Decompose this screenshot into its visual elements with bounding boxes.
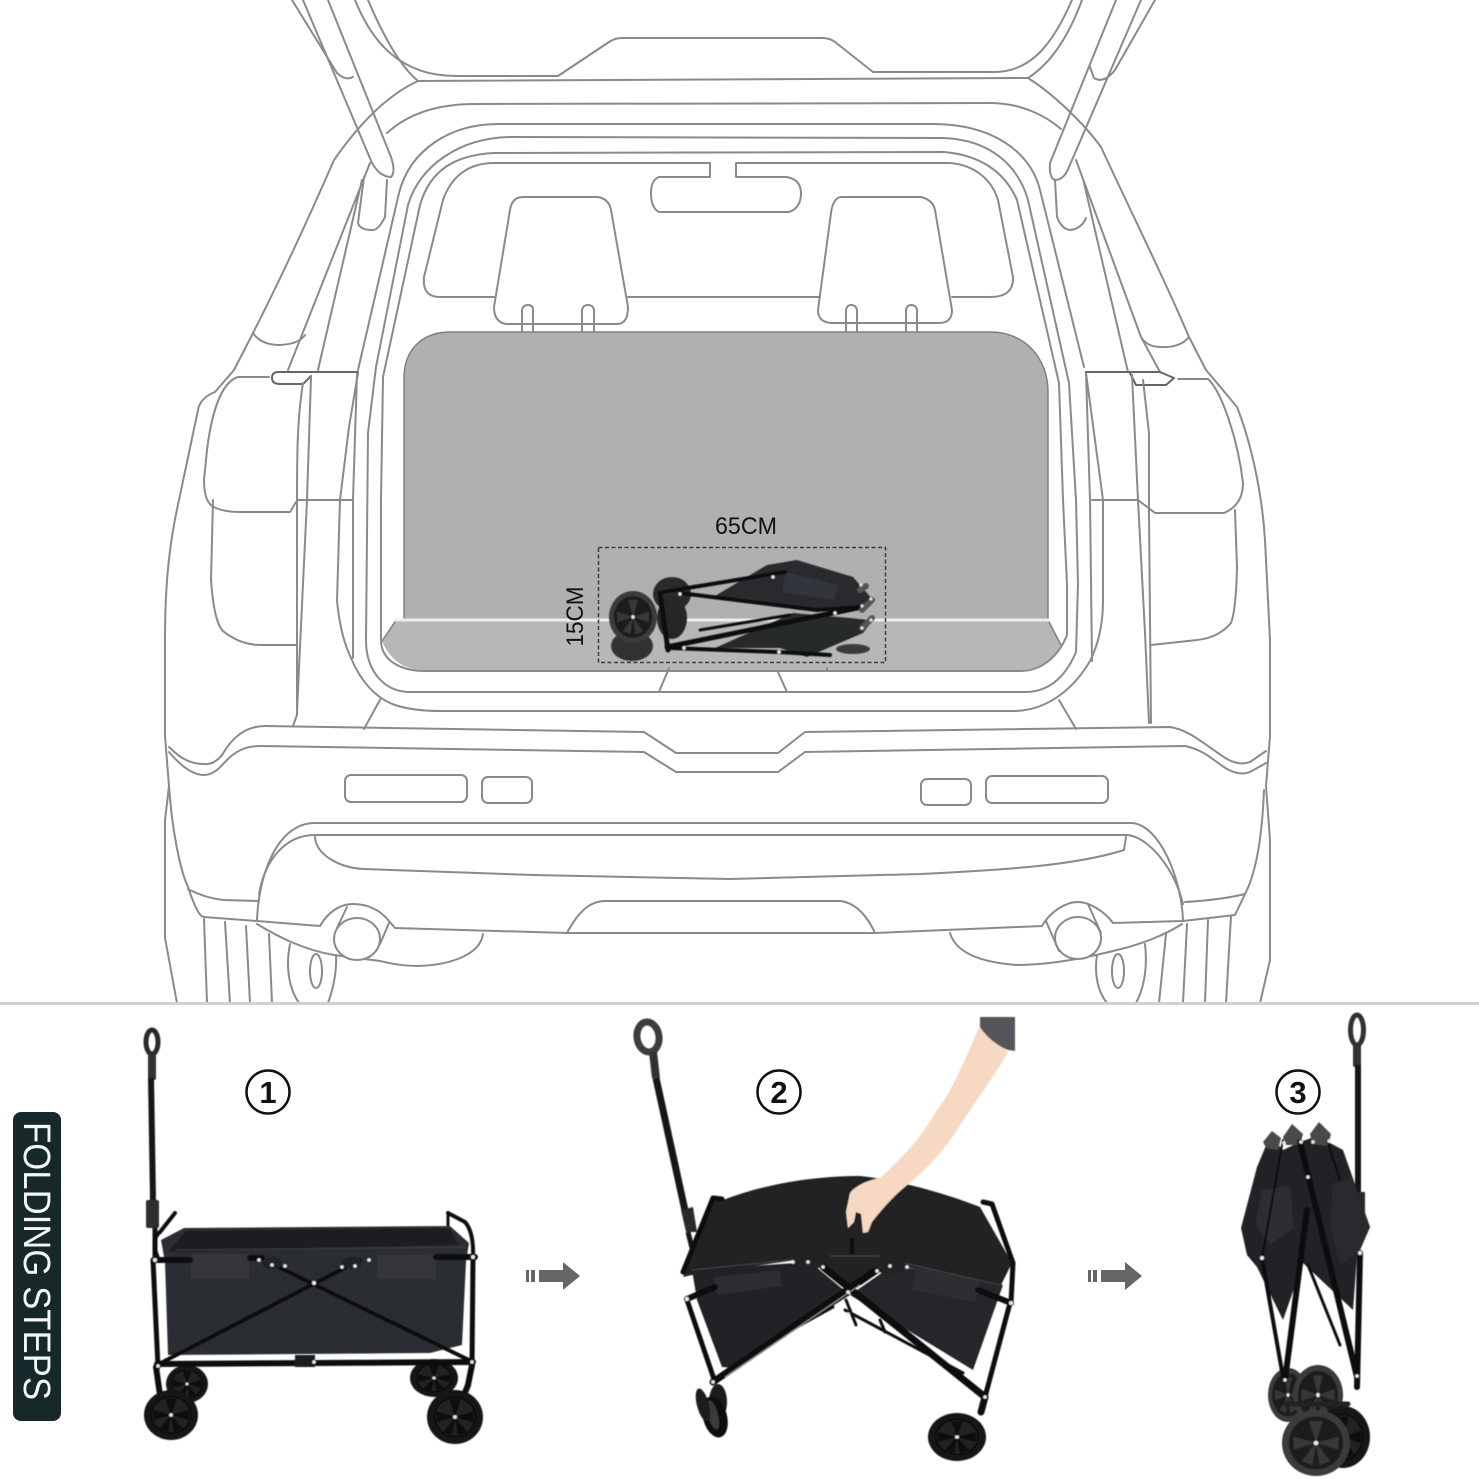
door frame lines	[337, 124, 1103, 729]
step 3 top hinges	[1263, 1122, 1331, 1150]
step 3 fabric	[1241, 1136, 1370, 1320]
height label: 15CM	[562, 586, 589, 646]
step 2 number	[758, 1070, 800, 1114]
step 2 wagon	[635, 1017, 1015, 1461]
step 2 left wheel	[693, 1384, 732, 1440]
tyres	[204, 916, 1231, 1003]
step 3 pivot dots	[1260, 1139, 1362, 1382]
step 1 front wheels	[144, 1390, 483, 1444]
car rear line drawing	[165, 0, 1270, 1003]
arrow 1	[526, 1262, 580, 1290]
tailgate and roof outlines	[165, 0, 1270, 1003]
step 1 side hoops	[154, 1213, 473, 1258]
dashed size box	[598, 548, 886, 662]
cargo area grey panel	[382, 332, 1061, 670]
left reflectors	[345, 775, 532, 803]
step 3 tow handle	[1350, 1015, 1365, 1220]
step 2 brace highlight	[725, 1285, 860, 1377]
step 2 number: 2	[770, 1075, 788, 1110]
folding steps badge: FOLDING STEPS	[15, 1122, 57, 1400]
step 1 fabric bin	[161, 1226, 469, 1355]
bumper beltline	[169, 726, 1266, 775]
step 2 arm and hand	[846, 1017, 1015, 1254]
step 3 rear wheels	[1268, 1365, 1370, 1468]
step 2 pivot dots	[685, 1260, 1013, 1399]
folded wagon rear wheels	[611, 577, 691, 661]
step 2 front fabric	[692, 1256, 1003, 1370]
step 1 frame	[153, 1257, 475, 1405]
step 1 pivot dots	[153, 1255, 475, 1368]
length label: 65CM	[715, 513, 777, 540]
tailgate struts	[253, 0, 1189, 372]
step 1 wagon	[144, 1030, 483, 1444]
step 2 inner bin	[683, 1176, 1012, 1290]
step 2 frame	[683, 1198, 1013, 1412]
step 3 frame legs	[1262, 1140, 1360, 1404]
step 2 front wheel	[928, 1413, 986, 1461]
rear seats and mirror	[424, 163, 1013, 332]
folded wagon frame	[660, 572, 872, 655]
step 3 number: 3	[1289, 1075, 1307, 1110]
step 1 flaps	[191, 1254, 436, 1279]
lower bumper and exhausts	[169, 786, 1264, 966]
divider band	[0, 1002, 1479, 1005]
folded wagon fabric	[715, 560, 873, 657]
step 1 rear wheels	[166, 1359, 458, 1403]
step 3 number	[1276, 1070, 1320, 1114]
step 2 tow handle	[635, 1021, 697, 1248]
step 1 number: 1	[259, 1075, 277, 1110]
right reflectors	[921, 776, 1108, 805]
step 2 under frame	[743, 1300, 963, 1373]
folded wagon pivot dots	[678, 575, 872, 654]
step 3 folded wagon	[1241, 1015, 1370, 1476]
step 1 number	[246, 1070, 290, 1114]
step 1 tow handle	[146, 1030, 159, 1260]
folded wagon front wheel	[609, 591, 657, 643]
folded wagon in boot	[609, 560, 873, 661]
tail lights and side panels	[204, 372, 1243, 726]
arrow 2	[1088, 1262, 1142, 1290]
lower white panel	[0, 1005, 1479, 1479]
step 3 front wheel	[1282, 1410, 1350, 1476]
